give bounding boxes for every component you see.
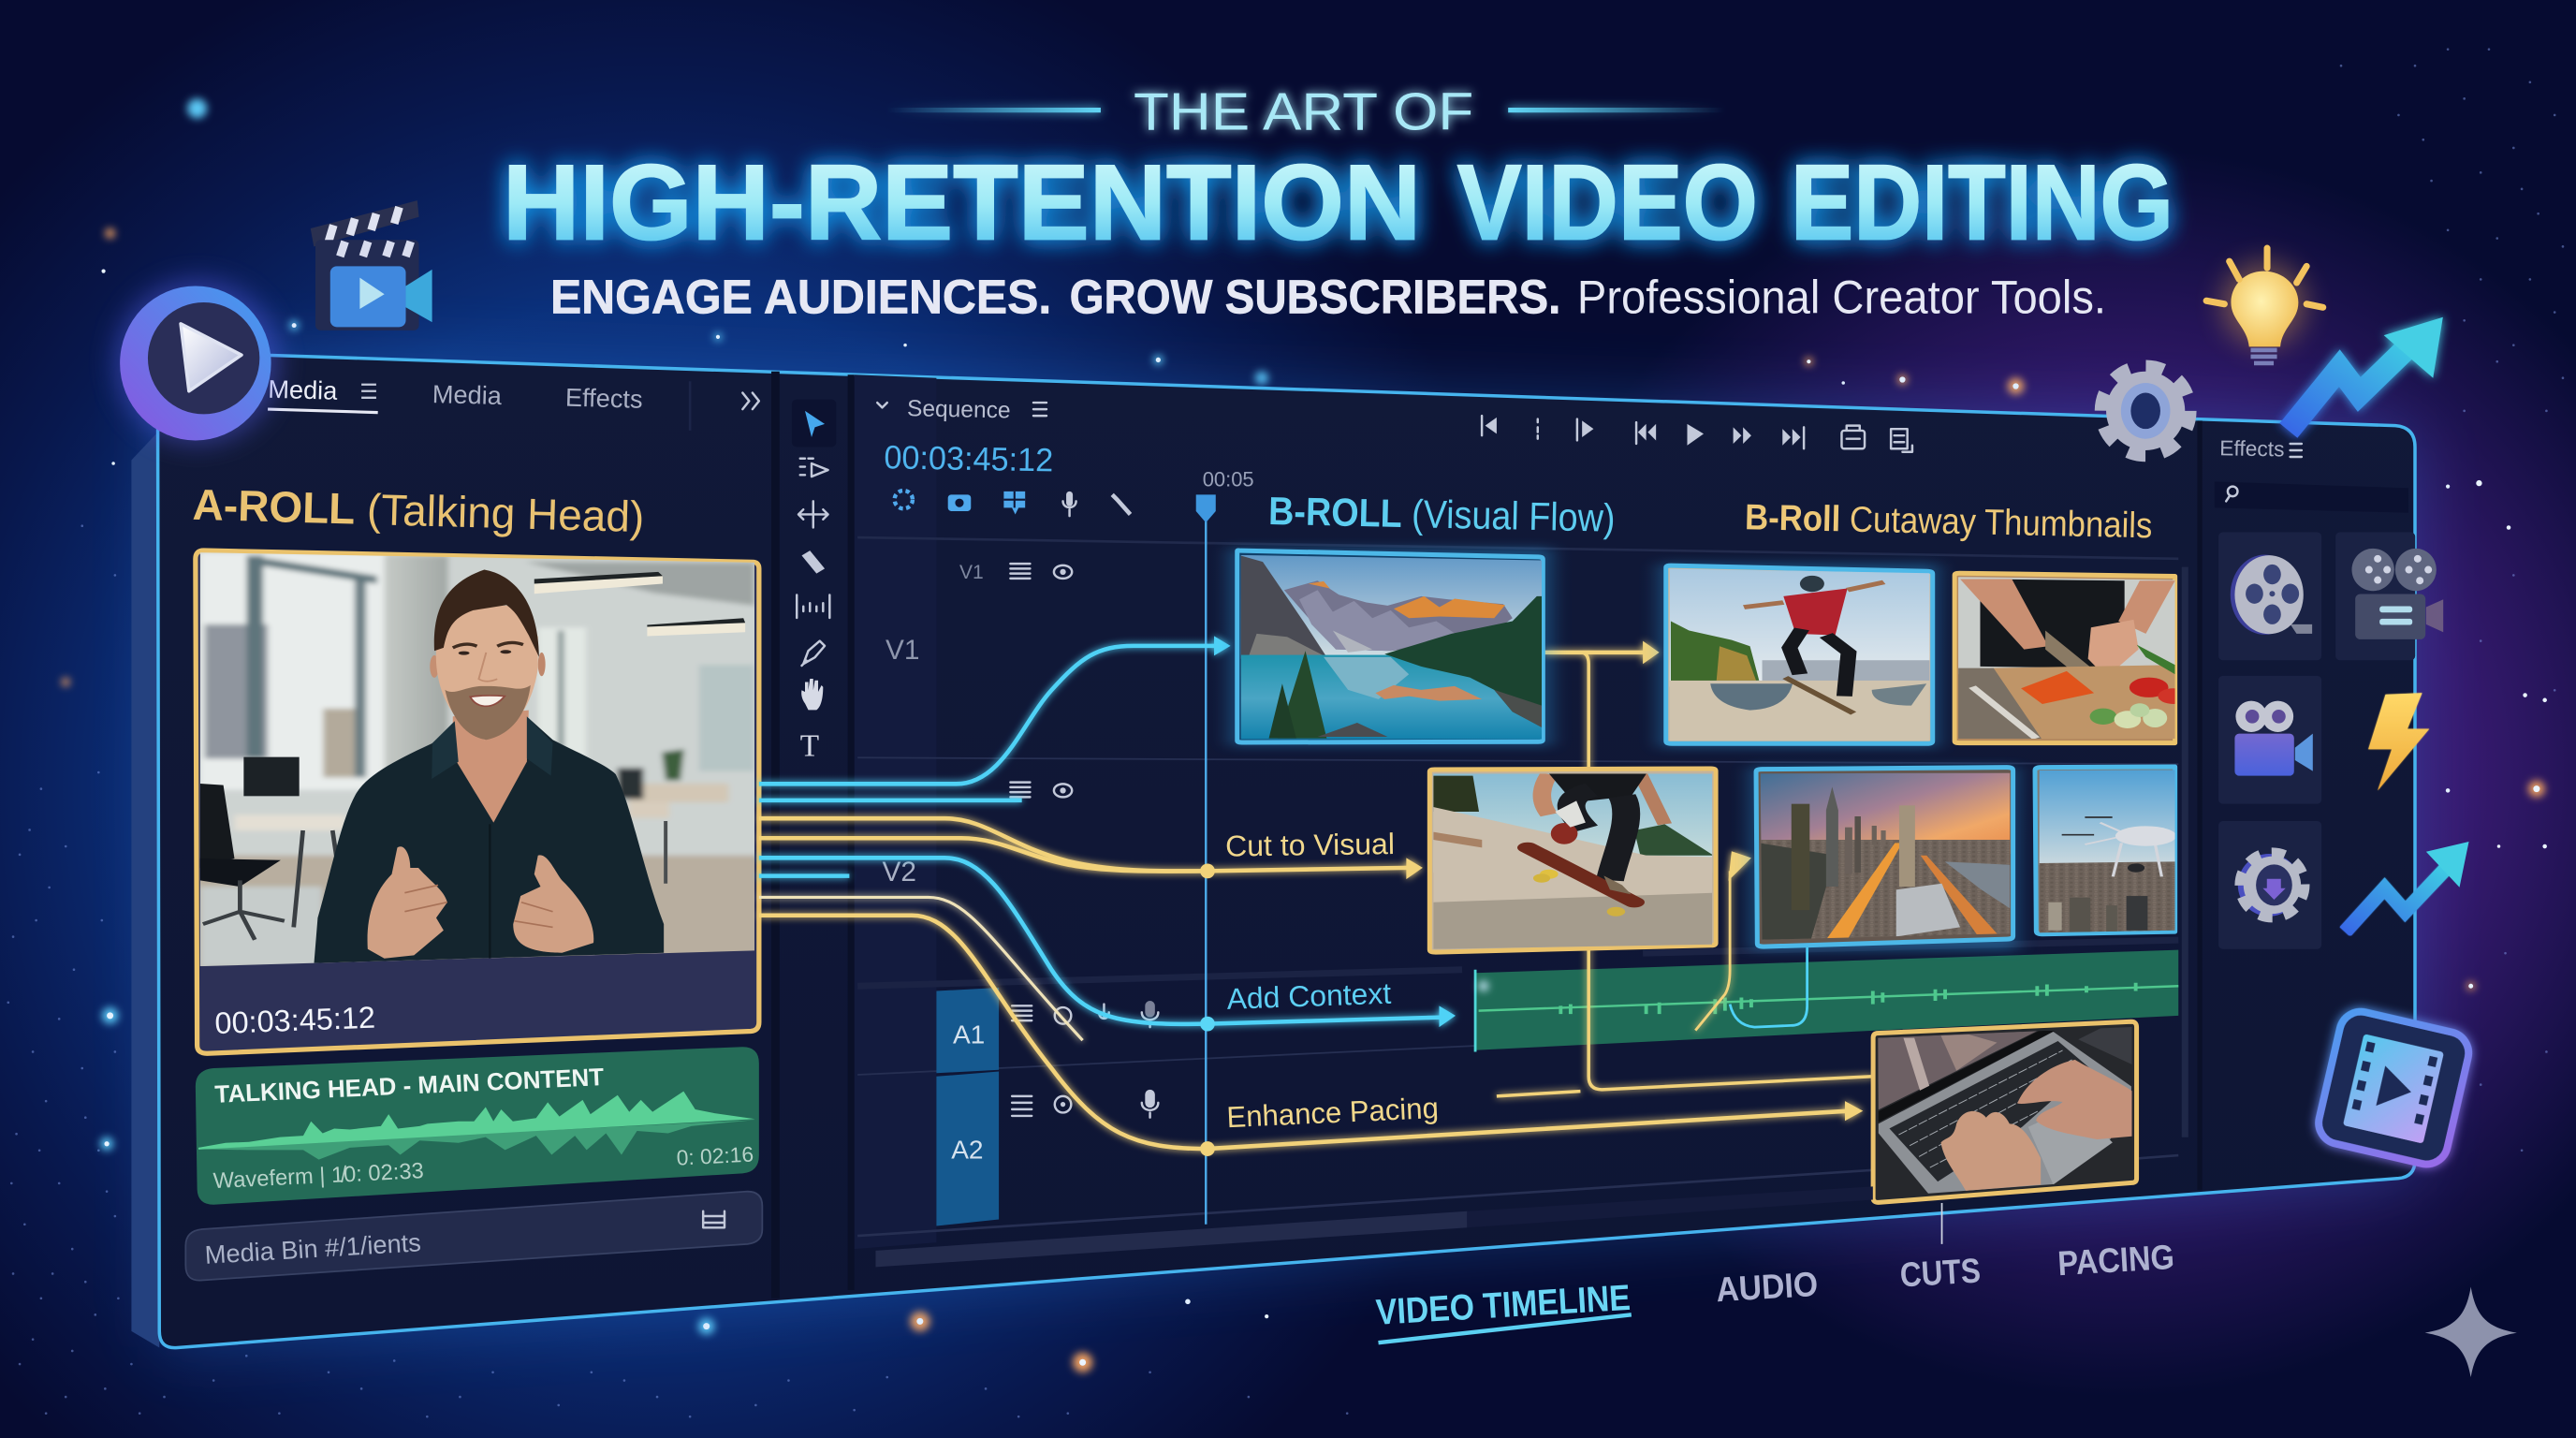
transport controls [1482, 416, 1912, 452]
title: high-retention video editing: EDITING [1791, 143, 2174, 262]
sequence header [877, 396, 1046, 423]
sequence timecode: 00:03:45:12 [884, 439, 1054, 478]
icon: camcorder [2234, 701, 2313, 776]
title: the art of: THE ART OF [1134, 82, 1473, 141]
thumbnail: laptop typing [1873, 1021, 2137, 1202]
subtitle [550, 270, 1560, 323]
audio card [196, 1047, 759, 1205]
title: high-retention video editing [503, 143, 2174, 262]
effects pane header: Effects [2219, 435, 2285, 461]
icon: settings cog [2101, 366, 2190, 455]
card title: TALKING HEAD - MAIN CONTENT [214, 1063, 605, 1108]
heading: b-roll visual flow: B-ROLL (Visual Flow) [1268, 489, 1616, 540]
label: add context: Add Context [1226, 976, 1392, 1016]
thumbnail: city sunset [1756, 768, 2013, 946]
timeline toolbar icons [895, 491, 1131, 516]
icon: clapperboard [311, 200, 432, 330]
audio track labels: A1 [953, 1020, 985, 1049]
subtitle: GROW SUBSCRIBERS. [1070, 270, 1560, 323]
icon tiles [2218, 532, 2415, 949]
audio track waveform [1475, 950, 2178, 1051]
bottom tab: cuts: CUTS [1899, 1251, 1982, 1294]
talking head photo [200, 552, 754, 966]
a-roll video frame [192, 543, 772, 1053]
title: high-retention video editing: HIGH-RETENTION [503, 143, 1421, 262]
icon: film reel [2231, 555, 2312, 635]
heading: a-roll: A-ROLL (Talking Head) [192, 480, 645, 541]
track v2 controls [882, 783, 1072, 888]
editor panel frame [131, 353, 2415, 1348]
thumbnail: skateboard trick [1429, 769, 1716, 952]
timeline rows [857, 537, 2185, 1236]
waveform caption: Waveferm | 1̸0: 02:33 [212, 1159, 424, 1194]
icon: play button [115, 279, 279, 444]
icon: lightning bolt [2368, 693, 2429, 790]
timeline nodes [1200, 863, 1215, 1156]
effects pane header [2215, 435, 2408, 513]
title: high-retention video editing: VIDEO [1457, 143, 1758, 262]
track v1 controls: V1 [959, 562, 984, 583]
waveform duration: 0: 02:16 [676, 1142, 754, 1170]
waveform [198, 1092, 755, 1160]
icon: small growth arrow [2345, 842, 2469, 932]
heading: cutaway thumbnails: B-Roll Cutaway Thumbnails [1745, 497, 2153, 546]
icon: lightbulb [2206, 248, 2323, 363]
title: the art of [887, 82, 1725, 141]
a-roll timecode: 00:03:45:12 [214, 1001, 376, 1040]
sequence header: Sequence [907, 396, 1011, 423]
bottom tab: video timeline: VIDEO TIMELINE [1375, 1278, 1632, 1333]
media bin bar: Media Bin #/1/ients [204, 1227, 422, 1269]
label: enhance pacing: Enhance Pacing [1226, 1091, 1440, 1134]
flow lines: blue [759, 636, 1456, 1027]
audio track labels [936, 988, 1158, 1226]
bottom tab: pacing: PACING [2056, 1238, 2175, 1283]
track v1 controls: V1 [886, 635, 919, 666]
thumbnail glow [1229, 548, 2018, 950]
left pane tabs [268, 374, 759, 414]
label: cut to visual: Cut to Visual [1225, 827, 1395, 863]
playhead [1196, 494, 1216, 1225]
icon: growth arrow [2289, 317, 2443, 431]
bottom tab: audio: AUDIO [1715, 1265, 1819, 1309]
subtitle tagline: Professional Creator Tools. [1577, 271, 2106, 323]
thumbnail: mountain lake [1237, 550, 1543, 742]
tool column [792, 400, 836, 763]
thumbnails upper/lower groups [1229, 548, 2188, 952]
media bin bar [185, 1192, 762, 1281]
flow lines: gold [759, 641, 1873, 1149]
subtitle: ENGAGE AUDIENCES. [550, 270, 1051, 323]
tool column: T [800, 728, 819, 763]
connector: blue from city thumb [1730, 945, 1808, 1027]
left pane tabs: Media [268, 374, 339, 405]
icon: film tile [2315, 1007, 2473, 1168]
man [314, 715, 664, 963]
icon: settings gear [2238, 852, 2305, 917]
left pane tabs: Effects [565, 383, 643, 414]
timeline scrollbar [875, 1186, 1873, 1267]
thumbnail: cooking [1954, 573, 2188, 743]
left pane tabs: Media [432, 379, 503, 410]
playhead label: 00:05 [1203, 468, 1254, 492]
track v2 controls: V2 [882, 857, 916, 888]
icon: movie camera [2351, 549, 2443, 639]
connector: laptop to cuts tab [1941, 1203, 1943, 1244]
thumbnail: skater air [1664, 565, 1933, 743]
audio track labels: A2 [951, 1136, 984, 1165]
sparkle watermark [2425, 1287, 2517, 1377]
thumbnail: drone [2035, 767, 2176, 934]
track v1 controls [886, 562, 1072, 666]
effects pane icons [2218, 532, 2469, 949]
